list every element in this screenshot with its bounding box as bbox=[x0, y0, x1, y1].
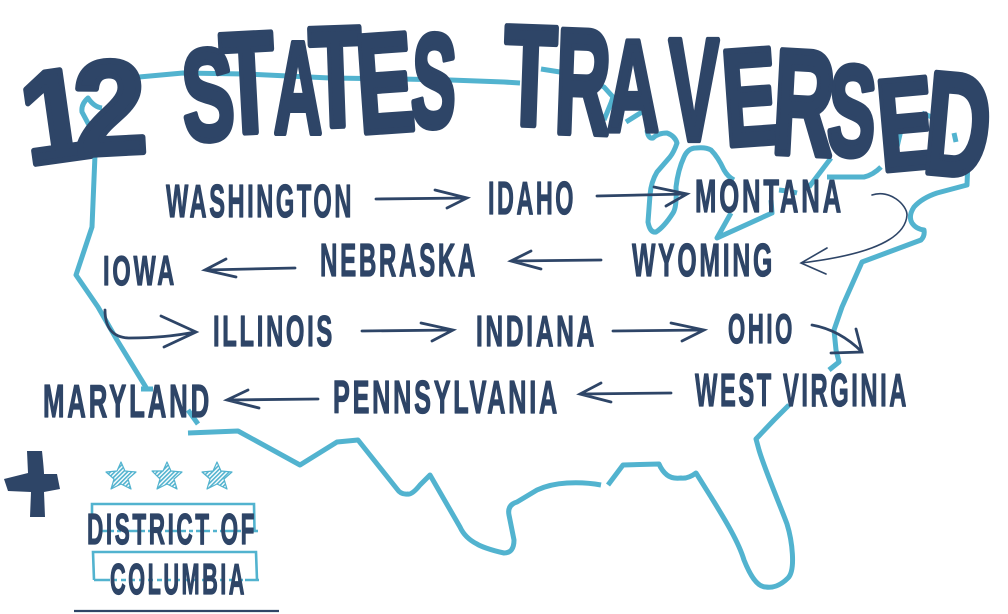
title: 12 States Traversed: V bbox=[669, 10, 719, 171]
state label: Illinois: ILLINOIS bbox=[213, 307, 335, 356]
title: 12 States Traversed: A bbox=[607, 14, 659, 159]
icon: three stars of the DC flag bbox=[106, 462, 232, 489]
arrow: Washington to Idaho bbox=[376, 190, 467, 208]
badge: District of Columbia: COLUMBIA bbox=[110, 555, 247, 604]
state label: Indiana: INDIANA bbox=[476, 307, 597, 356]
state label: Idaho: IDAHO bbox=[488, 172, 576, 224]
title: 12 States Traversed: S bbox=[178, 21, 238, 169]
state label: Iowa: IOWA bbox=[103, 247, 177, 294]
title: 12 States Traversed: D bbox=[919, 41, 997, 209]
title: 12 States Traversed: E bbox=[872, 51, 941, 199]
title: 12 States Traversed: 2 bbox=[70, 32, 150, 184]
state label: Wyoming: WYOMING bbox=[632, 234, 775, 286]
state label: Ohio: OHIO bbox=[728, 305, 795, 352]
arrow: Pennsylvania to Maryland bbox=[227, 390, 318, 408]
arrow: Idaho to Montana bbox=[597, 187, 687, 206]
title: 12 States Traversed: T bbox=[217, 3, 279, 165]
arrow: Ohio to West Virginia bbox=[812, 325, 862, 353]
badge: District of Columbia: DISTRICT OF bbox=[87, 505, 257, 554]
arrow: Indiana to Ohio bbox=[613, 323, 704, 341]
title: 12 States Traversed: T bbox=[307, 0, 365, 157]
arrow: Illinois to Indiana bbox=[362, 323, 453, 341]
arrow: Montana to Wyoming bbox=[801, 194, 907, 274]
title: 12 States Traversed: A bbox=[274, 16, 322, 162]
arrow: Iowa to Illinois bbox=[105, 310, 196, 347]
arrow: Nebraska to Iowa bbox=[205, 259, 295, 277]
arrow: West Virginia to Pennsylvania bbox=[580, 383, 671, 402]
title: 12 States Traversed bbox=[12, 0, 997, 209]
state label: Washington: WASHINGTON bbox=[166, 175, 354, 227]
underline rule beneath District of Columbia bbox=[74, 610, 279, 612]
title: 12 States Traversed: 1 bbox=[12, 39, 98, 193]
title: 12 States Traversed: E bbox=[717, 19, 783, 175]
state label: Pennsylvania: PENNSYLVANIA bbox=[333, 371, 560, 423]
state label: Montana: MONTANA bbox=[695, 170, 844, 222]
state label: Nebraska: NEBRASKA bbox=[320, 234, 478, 286]
title: 12 States Traversed: R bbox=[769, 18, 839, 188]
state label: Maryland: MARYLAND bbox=[43, 375, 212, 427]
title: 12 States Traversed: S bbox=[409, 7, 459, 157]
title: 12 States Traversed: T bbox=[501, 0, 559, 156]
title: 12 States Traversed: R bbox=[553, 0, 613, 167]
map outline of the United States bbox=[76, 69, 968, 587]
title: 12 States Traversed: S bbox=[824, 38, 880, 185]
badge: District of Columbia bbox=[87, 504, 259, 604]
title: 12 States Traversed: E bbox=[351, 2, 419, 163]
arrow: Wyoming to Nebraska bbox=[511, 251, 601, 269]
icon: plus sign bbox=[4, 451, 60, 517]
